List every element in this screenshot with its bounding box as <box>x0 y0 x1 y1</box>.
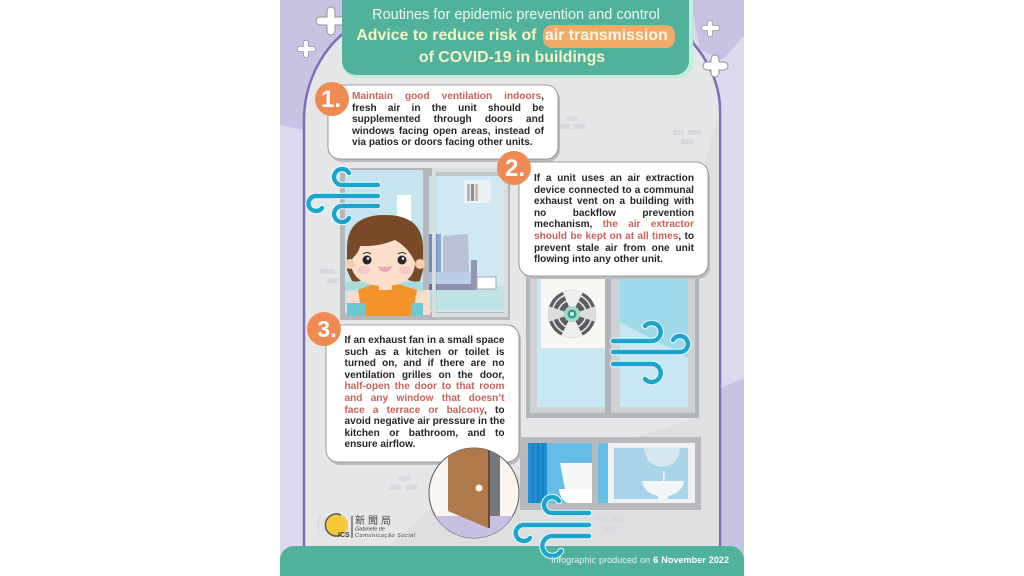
text: advice 2: mechanism, the air extractor <box>534 219 694 230</box>
text: advice 3: turned on, and if there are no <box>344 358 504 369</box>
text: advice 1: fresh air in the unit should be <box>352 103 544 114</box>
wind icon 3 <box>516 497 589 556</box>
wind icon 1 <box>308 169 378 222</box>
text: advice 2: prevent stale air from one unit <box>534 243 694 254</box>
window 3 with bathroom <box>520 437 701 510</box>
text: advice 2: should be kept on at all times, to <box>534 231 694 242</box>
text: advice 3: face a terrace or balcony, to <box>344 405 504 416</box>
header banner <box>342 0 693 78</box>
logo: Comunicação Social <box>355 533 416 539</box>
text: advice 1: windows facing open areas, instead of <box>352 126 544 137</box>
text: advice 3: If an exhaust fan in a small space <box>344 335 504 346</box>
text: advice 2: no backflow prevention <box>534 208 694 219</box>
text: advice 1: via patios or doors facing other units. <box>352 137 533 148</box>
text: advice 1: Maintain good ventilation indoors, <box>352 91 544 102</box>
logo: 新聞局 <box>355 514 394 527</box>
speech box 1 <box>328 85 560 162</box>
arch-shaped building wall <box>304 10 720 560</box>
speech box 2 <box>519 162 710 279</box>
number 3 badge <box>307 312 341 346</box>
text: advice 3: kitchen or bathroom, and to <box>344 428 504 439</box>
number 3 badge: 3. <box>317 316 337 342</box>
background <box>280 0 744 576</box>
main title: of COVID-19 in buildings <box>419 49 605 66</box>
mirror and sink <box>642 448 684 499</box>
number 2 badge <box>497 151 531 185</box>
main title <box>356 27 668 66</box>
text: advice 2 <box>534 173 694 265</box>
text: advice 2: flowing into any other unit. <box>534 254 663 265</box>
window 2 with exhaust fan <box>526 270 699 418</box>
logo: Gabinete de <box>355 526 385 532</box>
subtitle: Routines for epidemic prevention and control <box>372 7 660 23</box>
text: advice 2: exhaust vent on a building with <box>534 196 694 207</box>
text: advice 3: ventilation grilles on the door, <box>344 370 504 381</box>
exhaust fan <box>541 278 605 348</box>
number 2 badge: 2. <box>505 155 525 182</box>
footer bar <box>280 546 744 576</box>
footer credit: Infographic produced on 6 November 2022 <box>551 555 729 565</box>
text: advice 3: such as a kitchen or toilet is <box>344 347 504 358</box>
toilet <box>559 463 592 503</box>
speech box 3 <box>326 325 521 465</box>
main title: Advice to reduce risk of air transmission <box>356 27 668 44</box>
text: advice 2: device connected to a communal <box>534 185 694 196</box>
number 1 badge: 1. <box>321 86 341 113</box>
door illustration <box>429 445 519 540</box>
text: advice 3 <box>344 335 505 450</box>
text: advice 1: supplemented through doors and <box>352 114 544 125</box>
logo <box>318 514 416 539</box>
text: advice 3: avoid negative air pressure in the <box>344 416 505 427</box>
text: advice 3: half-open the door to that room <box>344 381 504 392</box>
text: advice 3: ensure airflow. <box>344 439 415 450</box>
text: advice 3: and any window that doesn’t <box>344 393 504 404</box>
wind icon 2 <box>613 323 688 382</box>
decorative plus signs <box>300 11 724 73</box>
girl <box>345 215 430 316</box>
number 1 badge <box>315 82 349 116</box>
text: advice 2: If a unit uses an air extraction <box>534 173 694 184</box>
text: advice 1 <box>352 91 544 148</box>
sofa and room <box>429 180 505 310</box>
logo: ICS <box>338 532 350 539</box>
window 1 with girl <box>340 168 510 320</box>
